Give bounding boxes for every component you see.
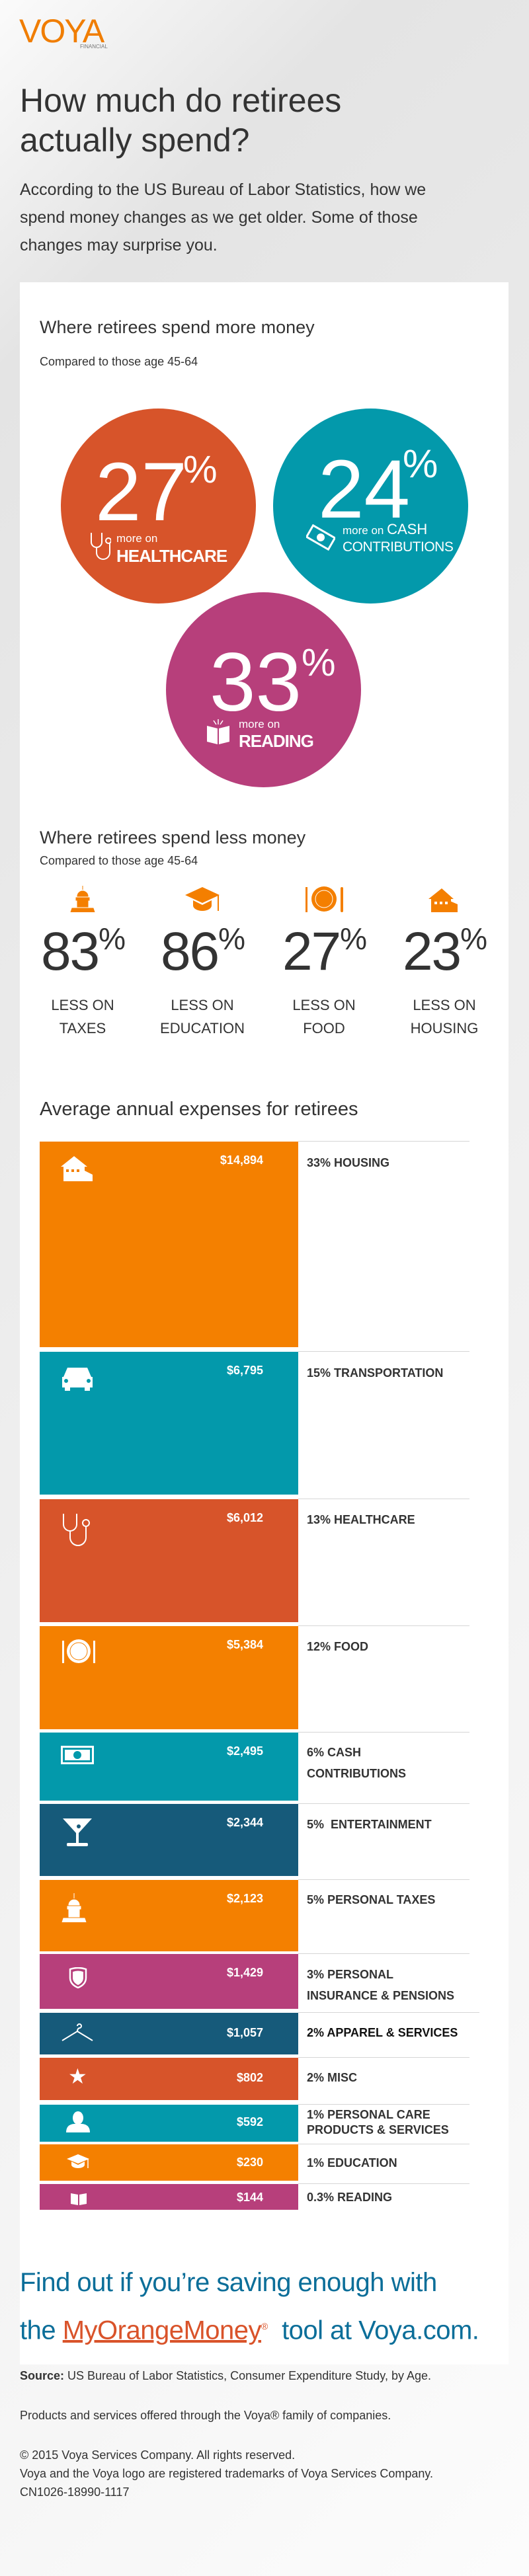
- bar: healthcare: $6,012: [227, 1511, 263, 1524]
- stat: food: [282, 886, 366, 1036]
- circle: cash contributions: CONTRIBUTIONS: [343, 539, 453, 555]
- call to action: the MyOrangeMoney® tool at Voya.com.: [20, 2316, 479, 2345]
- icon: plate: [305, 886, 343, 912]
- circle: healthcare: 27: [95, 446, 187, 538]
- bar: healthcare: [40, 1499, 298, 1622]
- icon: book: [207, 719, 229, 744]
- footer: source and legal: Source: US Bureau of Labor Statistics, Consumer Expenditure Study, by Age.: [20, 2369, 431, 2382]
- bar: personal taxes: $2,123: [227, 1892, 263, 1905]
- icon: stethoscope: [91, 533, 111, 560]
- bar: misc: [40, 2058, 298, 2100]
- bar: misc: ★: [68, 2064, 87, 2088]
- chart: expenses: PRODUCTS & SERVICES: [307, 2123, 449, 2136]
- stat: housing: 23%: [403, 921, 486, 982]
- panel: main: [20, 282, 509, 2364]
- bar: food: $5,384: [227, 1638, 263, 1651]
- title: actually spend?: [20, 122, 249, 159]
- chart: expenses: 15% TRANSPORTATION: [307, 1366, 443, 1380]
- intro text: According to the US Bureau of Labor Statistics, how we spend money changes as we get older. Some of those changes may surprise you.: [20, 180, 426, 254]
- stat: taxes: 83%: [41, 921, 124, 982]
- bar: insurance: [40, 1954, 298, 2009]
- circle: reading: %: [302, 641, 336, 684]
- stat: housing: [403, 888, 487, 1036]
- circle: healthcare: more on: [116, 532, 157, 545]
- circle: cash contributions: 24: [318, 444, 410, 535]
- circle: reading: 33: [210, 637, 302, 728]
- stat: taxes: TAXES: [60, 1020, 106, 1036]
- footer: source and legal: Voya and the Voya logo are registered trademarks of Voya Services Company.: [20, 2467, 433, 2480]
- footer: source and legal: © 2015 Voya Services Company. All rights reserved.: [20, 2448, 295, 2462]
- bar: education: $230: [237, 2156, 263, 2169]
- stat: education: EDUCATION: [160, 1020, 245, 1036]
- icon: money: [306, 524, 335, 551]
- bar: entertainment: [40, 1804, 298, 1876]
- chart: expenses: 2% MISC: [307, 2071, 357, 2084]
- chart: expenses: 5% PERSONAL TAXES: [307, 1893, 435, 1906]
- bar: personal care: [40, 2105, 298, 2142]
- chart: expenses: 1% EDUCATION: [307, 2156, 397, 2169]
- bar: housing: [40, 1142, 298, 1347]
- circle: reading: [166, 592, 361, 787]
- stat: food: LESS ON: [292, 997, 356, 1013]
- chart: expenses: INSURANCE & PENSIONS: [307, 1989, 454, 2002]
- stat: taxes: LESS ON: [51, 997, 114, 1013]
- chart: expenses: 33% HOUSING: [307, 1156, 389, 1169]
- footer: source and legal: CN1026-18990-1117: [20, 2485, 129, 2499]
- chart: expenses: CONTRIBUTIONS: [307, 1767, 406, 1780]
- circle: healthcare: [61, 409, 256, 604]
- bar: food: [40, 1626, 298, 1729]
- circle: cash contributions: [273, 409, 468, 604]
- bar: insurance: $1,429: [227, 1966, 263, 1979]
- circle: cash contributions: %: [403, 442, 438, 486]
- circle: healthcare: %: [183, 448, 218, 491]
- bar: education: [40, 2144, 298, 2181]
- stat: housing: HOUSING: [411, 1020, 478, 1036]
- stat: food: 27%: [282, 921, 366, 982]
- chart: expenses: 12% FOOD: [307, 1640, 368, 1653]
- bar: personal care: $592: [237, 2115, 263, 2128]
- stat: education: [160, 887, 245, 1036]
- bar: misc: $802: [237, 2071, 263, 2084]
- chart: expenses: 1% PERSONAL CARE: [307, 2108, 430, 2121]
- heading: spend more: Where retirees spend more money: [40, 317, 315, 337]
- footer: source and legal: [20, 2369, 433, 2499]
- stat: taxes: [41, 886, 124, 1036]
- chart: expenses: 3% PERSONAL: [307, 1968, 393, 1981]
- bar: apparel: $1,057: [227, 2026, 263, 2039]
- logo: VOYA: [19, 13, 103, 50]
- logo: FINANCIAL: [80, 44, 108, 50]
- bar: reading: [40, 2184, 298, 2210]
- chart: expenses: 13% HEALTHCARE: [307, 1513, 415, 1526]
- bar: housing: $14,894: [220, 1153, 263, 1167]
- stat: housing: LESS ON: [413, 997, 476, 1013]
- call to action: [20, 2268, 479, 2345]
- icon: grad cap: [185, 887, 220, 911]
- circle: reading: READING: [239, 731, 313, 751]
- bar: cash contributions: $2,495: [227, 1744, 263, 1758]
- subheading: spend more: Compared to those age 45-64: [40, 355, 198, 368]
- bar: personal taxes: [40, 1880, 298, 1951]
- bar: transportation: $6,795: [227, 1364, 263, 1377]
- call to action: Find out if you’re saving enough with: [20, 2268, 437, 2297]
- stat: food: FOOD: [303, 1020, 345, 1036]
- bar: cash contributions: [40, 1733, 298, 1801]
- bar: transportation: [40, 1352, 298, 1495]
- chart: expenses: 2% APPAREL & SERVICES: [307, 2026, 458, 2039]
- bar: apparel: [40, 2013, 298, 2054]
- circle: reading: more on: [239, 718, 280, 730]
- circle: cash contributions: more on CASH: [343, 521, 427, 537]
- icon: capitol: [70, 886, 95, 912]
- chart: expenses: 6% CASH: [307, 1746, 361, 1759]
- stat: education: 86%: [161, 921, 244, 982]
- title: How much do retirees: [20, 82, 341, 119]
- heading: annual expenses: Average annual expenses for retirees: [40, 1099, 358, 1120]
- bar: reading: $144: [237, 2191, 263, 2204]
- icon: house: [428, 888, 458, 912]
- stat: education: LESS ON: [171, 997, 234, 1013]
- title: [20, 82, 341, 159]
- bar: entertainment: $2,344: [227, 1816, 263, 1829]
- heading: spend less: Where retirees spend less money: [40, 828, 305, 847]
- circle: healthcare: HEALTHCARE: [116, 546, 227, 566]
- footer: source and legal: Products and services offered through the Voya® family of companies.: [20, 2409, 391, 2422]
- chart: expenses: 0.3% READING: [307, 2191, 392, 2204]
- subheading: spend less: Compared to those age 45-64: [40, 854, 198, 867]
- chart: expenses: 5% ENTERTAINMENT: [307, 1818, 432, 1831]
